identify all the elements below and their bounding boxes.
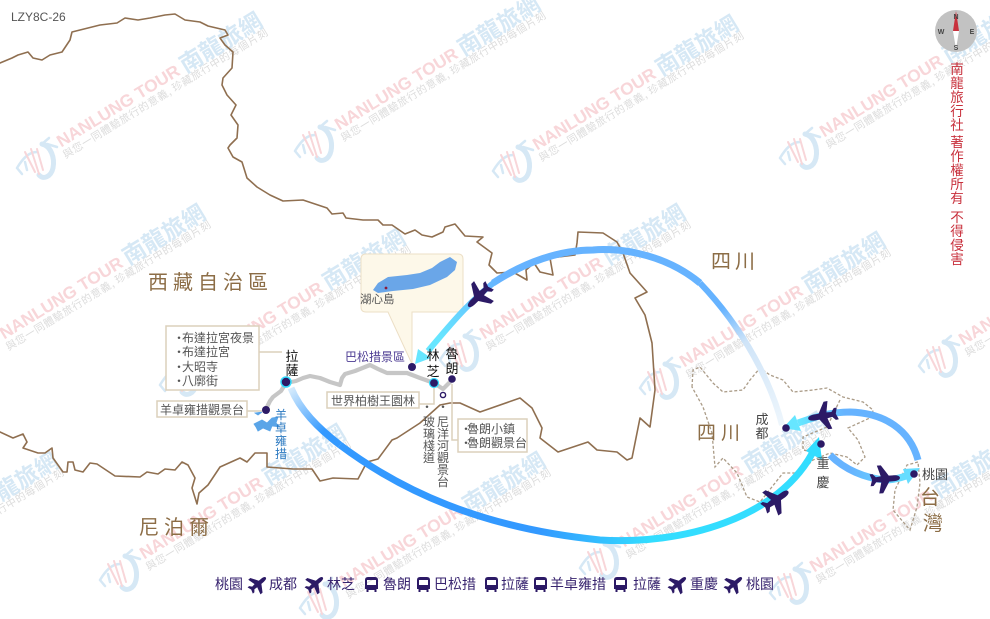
code label: LZY8C-26 xyxy=(11,10,66,24)
callout: Lhasa sights: · xyxy=(173,343,185,360)
label: Glass plank road: 璃 xyxy=(423,425,435,442)
copyright vertical text: 有 xyxy=(950,187,964,207)
watermark layer: 南龍旅網 xyxy=(255,414,351,492)
stop: Lhasa: 薩 xyxy=(285,360,299,379)
watermark layer: NANLUNG TOUR xyxy=(816,51,946,141)
stop: Chengdu: 成 xyxy=(755,409,769,428)
stop: Nyingchi: 林 xyxy=(426,345,440,364)
Yamdrok lake xyxy=(254,412,280,431)
plane icon near Chengdu xyxy=(806,400,840,432)
stop: Nyingchi xyxy=(426,345,440,388)
compass: W xyxy=(938,29,945,36)
callout: Lunang sights: 魯朗觀景台 xyxy=(467,434,527,451)
callout: Lhasa sights: 布達拉宮 xyxy=(182,343,230,360)
label: Nyang River viewpoint: 河 xyxy=(437,437,449,454)
label: Yamdrok Tso: 卓 xyxy=(275,419,287,436)
label: Nyang River viewpoint: 洋 xyxy=(437,425,449,442)
stop: Basum Tso xyxy=(408,363,416,371)
copyright vertical text: 著 xyxy=(950,131,964,151)
itinerary strip xyxy=(215,570,774,598)
watermark layer: NANLUNG TOUR xyxy=(196,278,326,368)
stop: Nyang River hollow marker xyxy=(440,392,446,398)
watermark layer: 與您一同體驗旅行的意義, 珍藏旅行中的每個片刻 xyxy=(3,217,214,354)
copyright vertical text: 侵 xyxy=(950,234,964,254)
route: ground road Lhasa to Lunang xyxy=(266,365,452,409)
callout: Cypress park: 世界柏樹王園林 xyxy=(331,392,415,409)
Sichuan dashed boundary xyxy=(692,367,873,502)
itinerary strip: 桃園 xyxy=(215,574,243,594)
plane icon near Taoyuan xyxy=(869,464,901,494)
itinerary strip: 林芝 xyxy=(327,574,355,594)
callout: Lunang sights xyxy=(458,419,527,452)
watermark layer: 與您一同體驗旅行的意義, 珍藏旅行中的每個片刻 xyxy=(203,242,414,379)
label: Glass plank road: 玻 xyxy=(423,413,435,430)
watermark layer: 與您一同體驗旅行的意義, 珍藏旅行中的每個片刻 xyxy=(343,465,554,602)
callout: Lhasa sights: · xyxy=(173,372,185,389)
callout: Lhasa sights: 大昭寺 xyxy=(182,358,218,375)
stop: Lhasa xyxy=(281,346,299,387)
watermark layer: 南龍旅網 xyxy=(795,222,891,300)
callout: Lhasa sights: 布達拉宮夜景 xyxy=(182,329,254,346)
region label: Sichuan upper: 四川 xyxy=(711,245,759,274)
copyright vertical text: 行 xyxy=(950,100,964,120)
region label: Taiwan: 台 xyxy=(920,481,940,510)
copyright vertical text: 旅 xyxy=(950,86,964,106)
callout leaders xyxy=(157,326,527,452)
watermark layer: NANLUNG TOUR xyxy=(136,473,266,563)
copyright vertical text: 作 xyxy=(950,145,964,165)
stop: Chongqing: 重 xyxy=(816,453,830,472)
itinerary strip: 成都 xyxy=(269,574,297,594)
itinerary strip: 拉薩 xyxy=(633,574,661,594)
label: Nyang River viewpoint: 尼 xyxy=(437,413,449,430)
watermark layer: 南龍旅網 xyxy=(455,442,551,520)
watermark layer: 與您一同體驗旅行的意義, 珍藏旅行中的每個片刻 xyxy=(683,245,894,382)
label: Yamdrok Tso: 雍 xyxy=(275,432,287,449)
stop: Taoyuan: 桃園 xyxy=(922,464,948,483)
label: Nyang River viewpoint: · xyxy=(437,398,449,415)
copyright vertical text: 龍 xyxy=(950,72,964,92)
itinerary strip: 魯朗 xyxy=(383,574,411,594)
watermark layer: NANLUNG TOUR xyxy=(676,281,806,371)
itinerary strip: 重慶 xyxy=(690,574,718,594)
region label: Sichuan lower: 四川 xyxy=(697,418,745,445)
compass xyxy=(935,10,977,52)
stop: Taoyuan xyxy=(910,464,948,483)
watermark layer: 與您一同體驗旅行的意義, 珍藏旅行中的每個片刻 xyxy=(483,217,694,354)
island label: 湖心島 xyxy=(360,291,394,307)
label: Glass plank road: 棧 xyxy=(423,437,435,454)
compass: N xyxy=(953,14,959,21)
label: Glass plank road: · xyxy=(421,398,433,415)
stop: Lunang xyxy=(445,343,459,383)
compass: S xyxy=(954,45,959,52)
label: Yamdrok Tso: 羊 xyxy=(275,406,287,423)
lake shape xyxy=(373,257,457,293)
flight arc: Taoyuan to Chengdu xyxy=(783,412,918,460)
watermark layer: NANLUNG TOUR xyxy=(336,501,466,591)
label: Basum Tso area: 巴松措景區 xyxy=(345,348,405,365)
copyright vertical text: 南 xyxy=(950,58,964,78)
callout: Lunang sights: · xyxy=(460,434,472,451)
copyright vertical text: 權 xyxy=(950,159,964,179)
watermark layer: 與您一同體驗旅行的意義, 珍藏旅行中的每個片刻 xyxy=(60,25,271,162)
region label: Taiwan: 灣 xyxy=(923,507,943,536)
flight arc: Chongqing to Taoyuan xyxy=(830,455,920,484)
callout: Lhasa sights: · xyxy=(173,329,185,346)
callout: Lunang sights: 魯朗小鎮 xyxy=(467,420,515,437)
lake island dot xyxy=(385,287,387,289)
region label: Nepal: 尼泊爾 xyxy=(139,511,214,540)
stop: Chongqing xyxy=(816,440,830,491)
stop: Lunang: 魯 xyxy=(445,343,459,362)
callout: Lhasa sights: 八廓街 xyxy=(182,372,218,389)
plane icon near Chongqing xyxy=(756,480,796,520)
watermark layer: NANLUNG TOUR xyxy=(529,64,659,154)
watermark layer: 與您一同體驗旅行的意義, 珍藏旅行中的每個片刻 xyxy=(143,437,354,574)
Basum Tso lake callout xyxy=(360,254,463,364)
copyright vertical text: 社 xyxy=(950,114,964,134)
stop: Chengdu: 都 xyxy=(755,423,769,442)
label: Nyang River viewpoint: 觀 xyxy=(437,449,449,466)
watermark layer: NANLUNG TOUR xyxy=(476,253,606,343)
callout: Lunang sights: · xyxy=(460,420,472,437)
watermark layer: 與您一同體驗旅行的意義, 珍藏旅行中的每個片刻 xyxy=(338,8,549,145)
region label: Tibet: 西藏自治區 xyxy=(148,266,273,295)
watermark layer: 南龍旅網 xyxy=(315,219,411,297)
callout: Lhasa sights xyxy=(166,326,259,390)
watermark layer: 南龍旅網 xyxy=(115,194,211,272)
copyright vertical text: 所 xyxy=(950,173,964,193)
flight arc: Lhasa to Chongqing xyxy=(291,388,822,541)
watermark layer: 南龍旅網 xyxy=(172,2,268,80)
watermark layer: 與您一同體驗旅行的意義, 珍藏旅行中的每個片刻 xyxy=(623,425,834,562)
plane icon over Nyingchi arc xyxy=(458,275,500,317)
watermark layer: NANLUNG TOUR xyxy=(53,61,183,151)
label: Nyang River viewpoint: 台 xyxy=(437,473,449,490)
watermark layer: NANLUNG TOUR xyxy=(0,253,126,343)
compass: E xyxy=(970,29,975,36)
copyright vertical text: 害 xyxy=(950,248,964,268)
Taiwan dashed outline xyxy=(893,462,920,530)
label: Nyang River viewpoint: 景 xyxy=(437,461,449,478)
watermark layer: NANLUNG TOUR xyxy=(331,44,461,134)
watermark layer: 南龍旅網 xyxy=(595,194,691,272)
callout: Lhasa sights: · xyxy=(173,358,185,375)
watermark layer: 南龍旅網 xyxy=(648,5,744,83)
stop: Chongqing: 慶 xyxy=(816,472,830,491)
watermark layer: NANLUNG TOUR xyxy=(616,461,746,551)
stop: Yamdrok viewpoint xyxy=(262,406,270,414)
itinerary strip: 桃園 xyxy=(746,574,774,594)
watermark layer: NANLUNG TOUR xyxy=(806,486,936,576)
label: Glass plank road: 道 xyxy=(423,449,435,466)
Chongqing dashed boundary xyxy=(803,400,840,453)
itinerary strip: 拉薩 xyxy=(501,574,529,594)
national border: north and east of Tibet xyxy=(0,14,655,504)
flight arc: Chengdu to Nyingchi xyxy=(415,249,782,425)
stop: Lhasa: 拉 xyxy=(285,346,299,365)
stop: Nyingchi: 芝 xyxy=(426,361,440,380)
stop: Lunang: 朗 xyxy=(445,358,459,377)
itinerary strip: 羊卓雍措 xyxy=(550,574,606,594)
copyright vertical text: 得 xyxy=(950,220,964,240)
itinerary strip: 巴松措 xyxy=(434,574,476,594)
stop: Chengdu xyxy=(755,409,790,442)
watermark layer: 與您一同體驗旅行的意義, 珍藏旅行中的每個片刻 xyxy=(536,28,747,165)
label: Yamdrok Tso: 措 xyxy=(275,445,287,462)
watermark layer: 南龍旅網 xyxy=(735,402,831,480)
copyright vertical text: 不 xyxy=(950,206,964,226)
callout: Yamdrok viewpoint: 羊卓雍措觀景台 xyxy=(160,401,244,418)
